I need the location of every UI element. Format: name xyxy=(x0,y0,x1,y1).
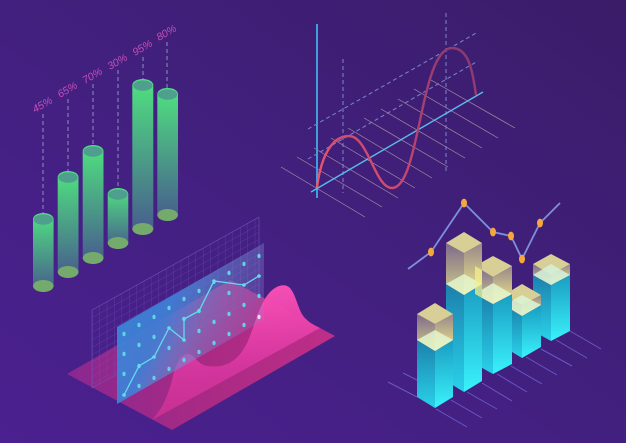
cylinder 70% xyxy=(83,145,104,264)
data dots xyxy=(122,254,261,388)
chart: isometric cyan bars xyxy=(388,199,601,427)
floor grid lines xyxy=(281,80,515,217)
pink mountain area xyxy=(152,285,320,420)
bar 5 xyxy=(533,254,570,341)
bar 2 xyxy=(446,232,482,392)
floor lines xyxy=(388,331,601,427)
red curve xyxy=(317,48,476,188)
percentage labels: 45% xyxy=(30,95,55,116)
bar 4 xyxy=(504,284,541,358)
chart: magenta area with blue panel xyxy=(67,217,335,430)
percentage labels: 80% xyxy=(154,23,179,44)
percentage labels: 30% xyxy=(106,52,130,73)
blue panel xyxy=(117,243,264,404)
dashed leader lines xyxy=(43,42,167,213)
percentage labels: 95% xyxy=(130,38,155,59)
chart: isometric wave line xyxy=(281,13,515,217)
line with orange markers xyxy=(408,199,560,269)
vertical axis xyxy=(316,24,318,198)
cyan line xyxy=(122,274,261,397)
bar 3 xyxy=(475,256,512,374)
floor plane xyxy=(67,280,335,430)
horizontal axis xyxy=(311,92,483,192)
cylinder 80% xyxy=(157,88,178,221)
cylinder 45% xyxy=(33,213,54,292)
bar 1 xyxy=(417,303,453,408)
grid wall xyxy=(92,217,259,388)
cylinder 65% xyxy=(58,171,78,278)
percentage labels xyxy=(30,23,179,116)
percentage labels: 65% xyxy=(56,80,80,101)
percentage labels: 70% xyxy=(80,66,105,87)
dashed guide lines xyxy=(308,13,478,193)
cylinder 95% xyxy=(132,79,153,235)
chart: green cylinders xyxy=(30,23,179,292)
cylinder 30% xyxy=(108,188,128,249)
